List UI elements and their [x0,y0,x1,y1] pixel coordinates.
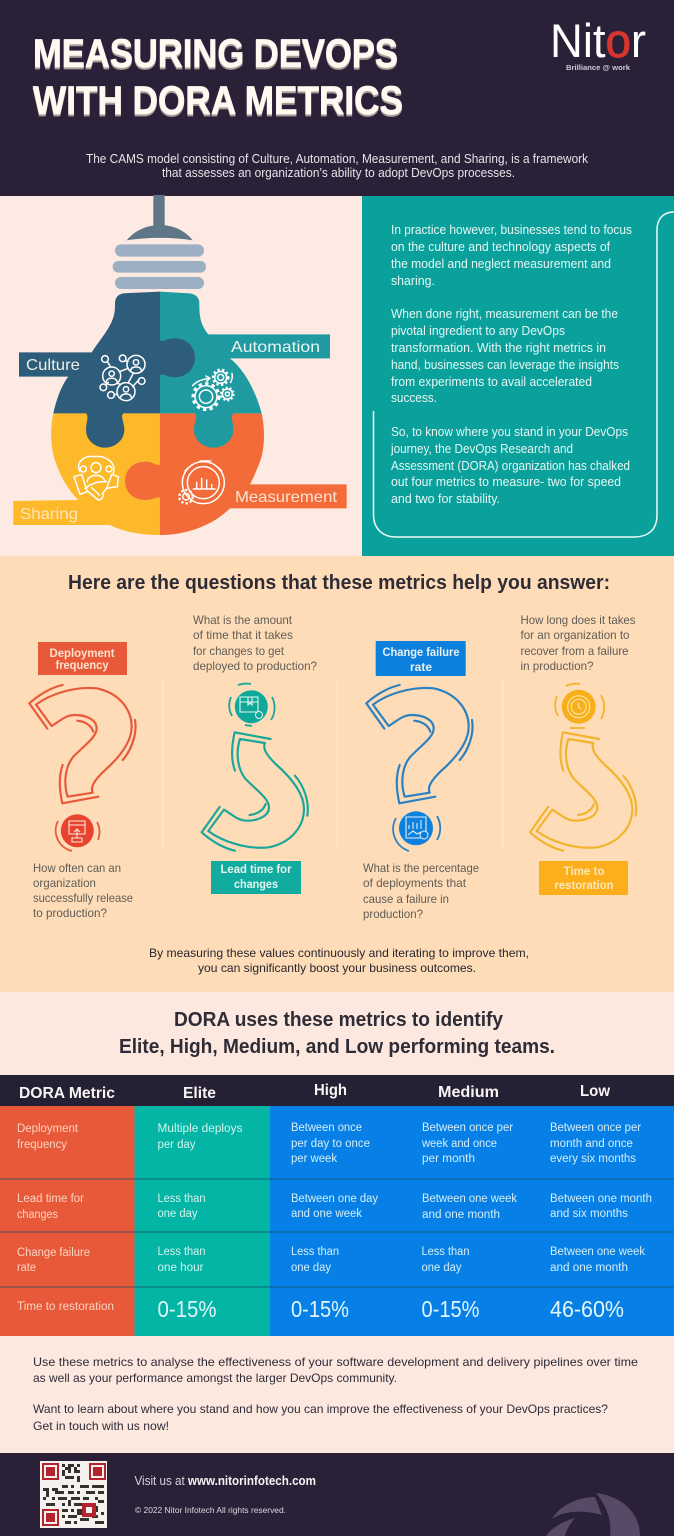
label box: restoration [554,878,614,892]
metric: lead time [193,613,317,894]
question text: How often can an [33,861,121,875]
panel: performance heading [0,992,674,1075]
question text: deployed to production? [193,659,317,673]
question text [33,861,133,920]
column: medium: and one month [422,1209,500,1221]
column: medium: week and once [421,1138,497,1150]
question text: production? [363,907,423,921]
mirrored question mark [202,732,308,851]
puzzle piece: sharing [13,413,160,535]
column: low: Between one week [550,1246,645,1258]
label box: Time to [564,864,604,878]
label box: changes [234,877,278,891]
panel: questions [0,556,674,992]
puzzle piece: culture [19,292,195,448]
column: low: Between once per [550,1122,641,1134]
column: metric names: Lead time for [17,1193,84,1205]
question text: of deployments that [363,876,467,890]
paragraph text: sharing. [391,274,435,288]
icon: sharing handshake [74,456,118,500]
copyright: © 2022 Nitor Infotech All rights reserved. [135,1505,286,1515]
rounded outline [374,212,674,537]
title: WITH DORA METRICS [33,79,403,123]
intro text: that assesses an organization’s ability to adopt DevOps processes. [162,166,515,180]
paragraph text [390,223,632,506]
question mark [29,685,136,803]
column: elite: Less than [158,1193,206,1205]
paragraph text: hand, businesses can leverage the insights [391,358,619,372]
light bulb puzzle [13,195,347,535]
question text: recover from a failure [520,644,629,658]
column: metric names: changes [17,1209,58,1221]
column: elite [158,1123,243,1322]
intro text [86,152,589,180]
label: Measurement: Measurement [235,489,338,506]
column: elite: one hour [158,1262,204,1274]
column: low: Between one month [550,1193,652,1205]
column: high: Between once [291,1122,362,1134]
question mark [366,685,473,803]
question text: What is the percentage [363,861,479,875]
paragraph text: and two for stability. [391,492,500,506]
paragraph text: success. [391,391,437,405]
question text: to production? [33,906,107,920]
paragraph text: out four metrics to measure- two for speed [391,475,621,489]
panel: call to action: Want to learn about where you stand and how you can improve the effectiveness of your DevOps practices? [33,1402,608,1416]
question text: What is the amount [193,613,293,627]
column: elite: per day [158,1139,196,1151]
column: elite: 0-15% [158,1296,216,1322]
puzzle piece: automation [160,292,330,448]
column: high: one day [291,1262,331,1274]
column: medium: Between one week [422,1193,517,1205]
paragraph text: When done right, measurement can be the [391,307,618,321]
table columns [0,1106,674,1336]
question text [520,613,636,673]
logo: Nitor: Nitor [550,14,646,67]
paragraph text: pivotal ingredient to any DevOps [391,324,565,338]
icon: report [393,811,440,851]
question text: for changes to get [193,644,285,658]
closing statement: By measuring these values continuously and iterating to improve them, [149,946,529,960]
table header [0,1075,674,1106]
label box [376,641,466,676]
column: metric names: rate [17,1262,36,1274]
puzzle piece: measurement [125,413,347,535]
metric: deployment frequency [29,642,136,920]
question text: How long does it takes [520,613,636,627]
panel: header [0,0,674,196]
column: medium: per month [422,1153,475,1165]
paragraph text: on the culture and technology aspects of [391,240,611,254]
question text: for an organization to [520,628,630,642]
column: elite: Multiple deploys [158,1123,243,1135]
bulb cap [113,195,206,289]
QR code [40,1461,107,1528]
closing statement [149,946,529,975]
question text: cause a failure in [363,892,449,906]
icon: culture network [100,355,145,401]
panel: performance heading: Elite, High, Medium, and Low performing teams. [119,1036,555,1058]
table header: Low [580,1083,611,1100]
question text: organization [33,876,96,890]
column: metric names: Time to restoration [17,1301,114,1313]
question text: in production? [520,659,594,673]
table header: Medium [438,1084,499,1101]
label: Automation: Automation [231,339,320,356]
column: metric names [17,1123,114,1313]
column: low: every six months [550,1153,636,1165]
column: low: 46-60% [550,1296,624,1322]
column: elite: Less than [158,1246,206,1258]
paragraph text: journey, the DevOps Research and [390,442,573,456]
label box [539,861,628,895]
column: high: 0-15% [291,1296,349,1322]
column: elite: one day [158,1208,198,1220]
icon: swirl logo [546,1493,640,1536]
label box: Change failure [382,645,460,659]
question text [193,613,317,673]
label: Culture: Culture [26,357,80,374]
icon: automation gears [193,370,234,410]
label box: rate [410,660,432,674]
column: medium: one day [422,1262,462,1274]
icon: clock [555,684,604,728]
label box: frequency [56,658,109,672]
panel: call to action [0,1336,674,1453]
metric: time to restoration [520,613,636,895]
column: low: month and once [550,1138,633,1150]
question text: of time that it takes [193,628,293,642]
column: medium: Between once per [422,1122,513,1134]
column: high: and one week [291,1208,362,1220]
column: low: and one month [550,1262,628,1274]
paragraph text: from experiments to avail accelerated [391,375,592,389]
column: low [550,1122,652,1322]
paragraph text: Assessment (DORA) organization has chalked [391,459,630,473]
panel: call to action: Get in touch with us now! [33,1419,169,1433]
column: metric names: frequency [17,1139,67,1151]
paragraph text: So, to know where you stand in your DevOps [391,425,628,439]
column: metric names: Deployment [17,1123,79,1135]
column: medium: 0-15% [422,1296,480,1322]
title [33,32,403,123]
column: metric names: Change failure [17,1247,90,1259]
label: Sharing: Sharing [20,506,78,523]
table header: Elite [183,1085,216,1102]
label box [211,861,301,894]
panel: call to action: as well as your performance amongst the larger DevOps community. [33,1371,397,1385]
table header: High [314,1082,347,1099]
table: DORA metrics [0,1075,674,1336]
mirrored question mark [530,732,636,851]
paragraph text: the model and neglect measurement and [391,257,611,271]
panel: footer [0,1453,674,1536]
panel: teal explanation [362,196,674,556]
title: MEASURING DEVOPS [33,32,398,76]
website text: Visit us at www.nitorinfotech.com [134,1473,316,1488]
panel: call to action: Use these metrics to analyse the effectiveness of your software development and delivery pipelines over time [33,1355,638,1369]
closing statement: you can significantly boost your business outcomes. [198,961,476,975]
intro text: The CAMS model consisting of Culture, Automation, Measurement, and Sharing, is a framework [86,152,589,166]
metric: change failure rate [363,641,479,921]
heading: Here are the questions that these metrics help you answer: [68,572,610,594]
column: high: Between one day [291,1193,378,1205]
column: low: and six months [550,1208,628,1220]
column: medium [421,1122,517,1322]
paragraph text: In practice however, businesses tend to focus [391,223,632,237]
panel: CAMS light bulb [0,195,362,556]
column: high: per week [291,1153,337,1165]
column: high: Less than [291,1246,339,1258]
table header: DORA Metric [19,1085,115,1102]
paragraph text: transformation. With the right metrics in [391,341,606,355]
question text: successfully release [33,891,133,905]
label box [38,642,127,675]
label box: Lead time for [220,862,292,876]
icon: stopwatch [179,461,224,504]
column: high [291,1122,378,1322]
panel: performance heading: DORA uses these metrics to identify [174,1009,504,1031]
question text [363,861,479,921]
icon: deployment [56,814,99,851]
label box: Deployment [50,646,114,660]
logo: Nitor: Brilliance @ work [566,65,630,72]
column: high: per day to once [291,1138,370,1150]
icon: package clock [229,684,275,726]
column: medium: Less than [422,1246,470,1258]
